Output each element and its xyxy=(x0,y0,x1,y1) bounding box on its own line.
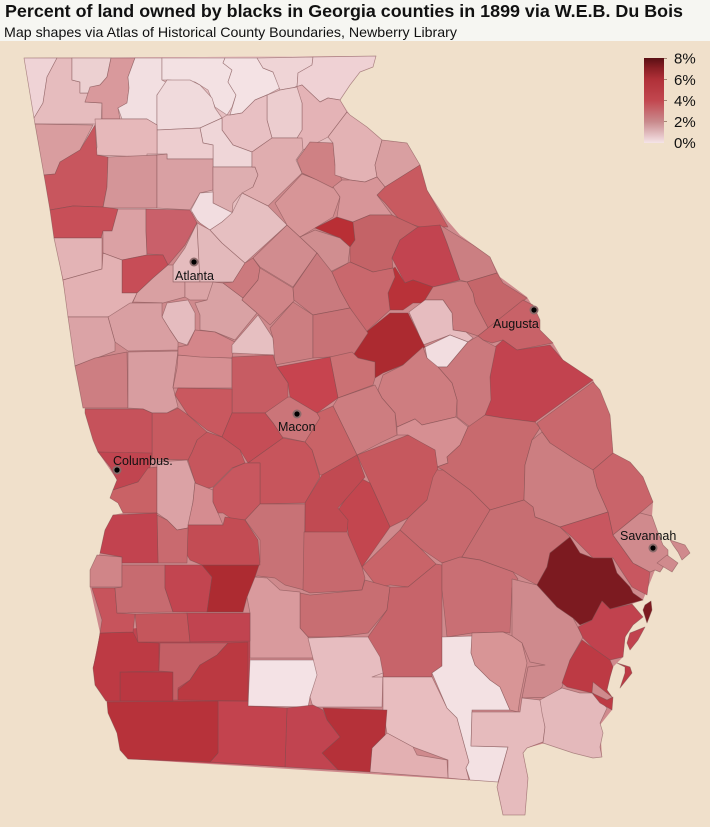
city marker: Savannah xyxy=(620,529,676,552)
city marker: Columbus: Columbus. xyxy=(113,454,173,468)
southwest underlay xyxy=(93,613,285,767)
city marker: Atlanta: Atlanta xyxy=(175,269,214,283)
legend: colour scale 0% to 8%: 4% xyxy=(674,93,696,110)
southwestern counties xyxy=(90,504,469,780)
city marker: Augusta: Augusta xyxy=(493,317,539,331)
legend: colour scale 0% to 8%: 2% xyxy=(674,114,696,131)
southeastern and coastal counties xyxy=(432,500,690,815)
legend: colour scale 0% to 8%: 8% xyxy=(674,50,696,68)
legend: colour scale 0% to 8% xyxy=(644,50,696,152)
city marker: Atlanta xyxy=(175,258,214,283)
city marker: Savannah: Savannah xyxy=(620,529,676,543)
subtitle: Map shapes via Atlas of Historical County Boundaries, Newberry Library xyxy=(4,24,457,40)
central counties xyxy=(68,253,653,588)
north underlay xyxy=(24,56,382,213)
city marker: Augusta xyxy=(493,306,539,331)
header band with title and subtitle xyxy=(0,0,710,41)
legend: colour scale 0% to 8%: 0% xyxy=(674,135,696,152)
city marker: Macon xyxy=(278,410,316,434)
city marker: Columbus xyxy=(112,454,173,474)
title: Percent of land owned by blacks in Georgia counties in 1899 via W.E.B. Du Bois xyxy=(5,1,683,21)
legend: colour scale 0% to 8%: 6% xyxy=(674,72,696,89)
northern counties xyxy=(24,56,497,340)
city marker: Macon: Macon xyxy=(278,420,316,434)
